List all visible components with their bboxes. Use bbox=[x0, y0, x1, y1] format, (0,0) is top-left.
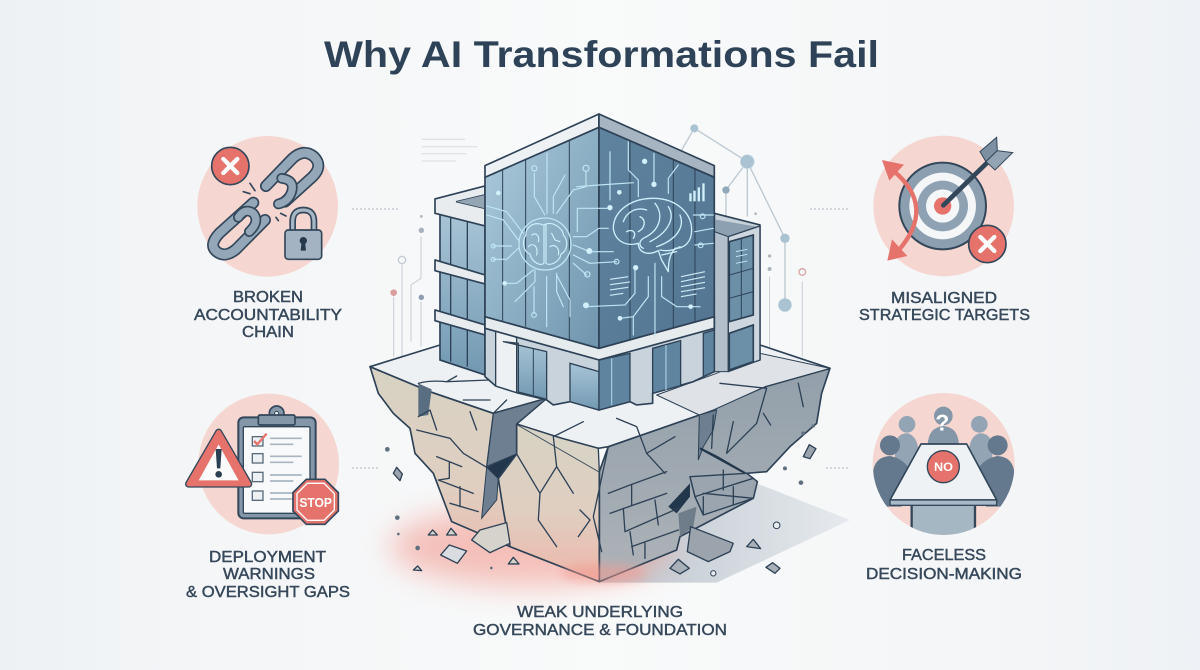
label: weak underlying governance and foundation: GOVERNANCE & FOUNDATION bbox=[473, 622, 727, 639]
large brain bbox=[613, 198, 692, 272]
fallen rubble bbox=[393, 445, 816, 574]
label: misaligned strategic targets: STRATEGIC TARGETS bbox=[859, 307, 1030, 324]
label: weak underlying governance and foundation: WEAK UNDERLYING bbox=[517, 604, 683, 621]
central illustration: building on cracked foundation bbox=[370, 114, 850, 587]
label: deployment warnings and oversight gaps: DEPLOYMENT bbox=[209, 549, 326, 566]
window mullions bbox=[503, 141, 695, 340]
label: faceless decision-making: FACELESS bbox=[902, 547, 986, 564]
label: deployment warnings and oversight gaps: WARNINGS bbox=[223, 566, 315, 583]
label: deployment warnings and oversight gaps bbox=[186, 549, 350, 601]
panel: misaligned strategic targets bbox=[859, 136, 1030, 324]
left wing bbox=[435, 186, 485, 375]
panel: deployment warnings and oversight gaps bbox=[186, 394, 350, 601]
label: misaligned strategic targets bbox=[859, 290, 1030, 324]
label: weak underlying governance and foundation bbox=[473, 604, 727, 639]
network decoration left and right bbox=[390, 124, 806, 357]
foundation shadow and red glow bbox=[390, 483, 850, 587]
label: broken accountability chain: CHAIN bbox=[242, 324, 294, 341]
icon: faceless meeting around table bbox=[873, 393, 1015, 537]
glass left face bbox=[485, 127, 599, 348]
lower floor bbox=[485, 317, 714, 410]
building bbox=[435, 114, 760, 410]
label: faceless decision-making bbox=[866, 547, 1022, 583]
title: Why AI Transformations Fail bbox=[324, 34, 879, 75]
foundation block bbox=[370, 345, 830, 583]
icon: broken chain and lock bbox=[197, 136, 338, 277]
parapet bbox=[485, 114, 714, 177]
panel: broken accountability chain bbox=[194, 136, 342, 341]
dotted connectors bbox=[352, 209, 850, 468]
label: broken accountability chain: BROKEN bbox=[233, 289, 303, 306]
icon: faceless meeting around table: ? bbox=[935, 410, 949, 436]
label: faceless decision-making: DECISION-MAKING bbox=[866, 566, 1022, 583]
icon: clipboard, warning triangle and stop sign: STOP bbox=[299, 496, 333, 510]
right wing bbox=[714, 213, 760, 372]
icon: faceless meeting around table: NO bbox=[934, 461, 953, 474]
glowing circuitry bbox=[487, 142, 713, 337]
panel: faceless decision-making bbox=[866, 393, 1022, 583]
label: deployment warnings and oversight gaps: & OVERSIGHT GAPS bbox=[186, 584, 350, 601]
label: misaligned strategic targets: MISALIGNED bbox=[891, 290, 997, 307]
glass right face bbox=[599, 127, 714, 348]
label: broken accountability chain: ACCOUNTABILITY bbox=[194, 307, 342, 324]
label: broken accountability chain bbox=[194, 289, 342, 341]
icon: target with missed arrow bbox=[873, 136, 1014, 276]
small brain bbox=[523, 223, 567, 264]
icon: clipboard, warning triangle and stop sign bbox=[189, 394, 339, 534]
